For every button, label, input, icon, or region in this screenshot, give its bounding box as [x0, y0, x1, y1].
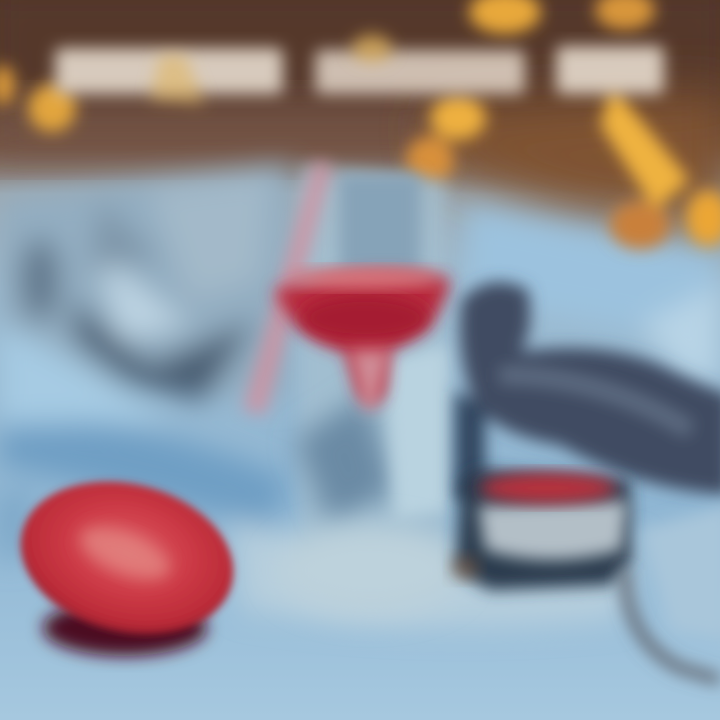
icon: red fruit half — [4, 460, 250, 656]
icon: dark bird shape — [455, 282, 720, 500]
bowl: body — [478, 500, 628, 560]
decorative fabric folds on left — [0, 165, 720, 628]
panel: warm header band — [0, 0, 720, 235]
glass: lower ice — [295, 395, 395, 525]
glass: upper interior — [340, 175, 420, 270]
heading: blurred title blocks — [55, 34, 664, 105]
bowl: brown glow — [451, 556, 479, 580]
glass — [243, 160, 465, 615]
red drink — [275, 272, 450, 402]
red drink highlight — [290, 268, 440, 288]
icons: orange string lights — [0, 0, 720, 249]
fruit shadow — [43, 600, 207, 656]
fruit highlight — [73, 516, 177, 590]
icon: bottom right handle — [625, 505, 720, 680]
glass: body — [300, 165, 448, 600]
glass: base — [275, 525, 465, 615]
red drink tail — [350, 350, 390, 410]
bowl: red filling — [480, 473, 616, 503]
icon: small bowl — [451, 470, 632, 590]
fruit flesh — [4, 460, 250, 656]
bowl: dark backing — [455, 470, 632, 590]
straw — [243, 160, 332, 415]
red drink dark core — [300, 294, 430, 342]
